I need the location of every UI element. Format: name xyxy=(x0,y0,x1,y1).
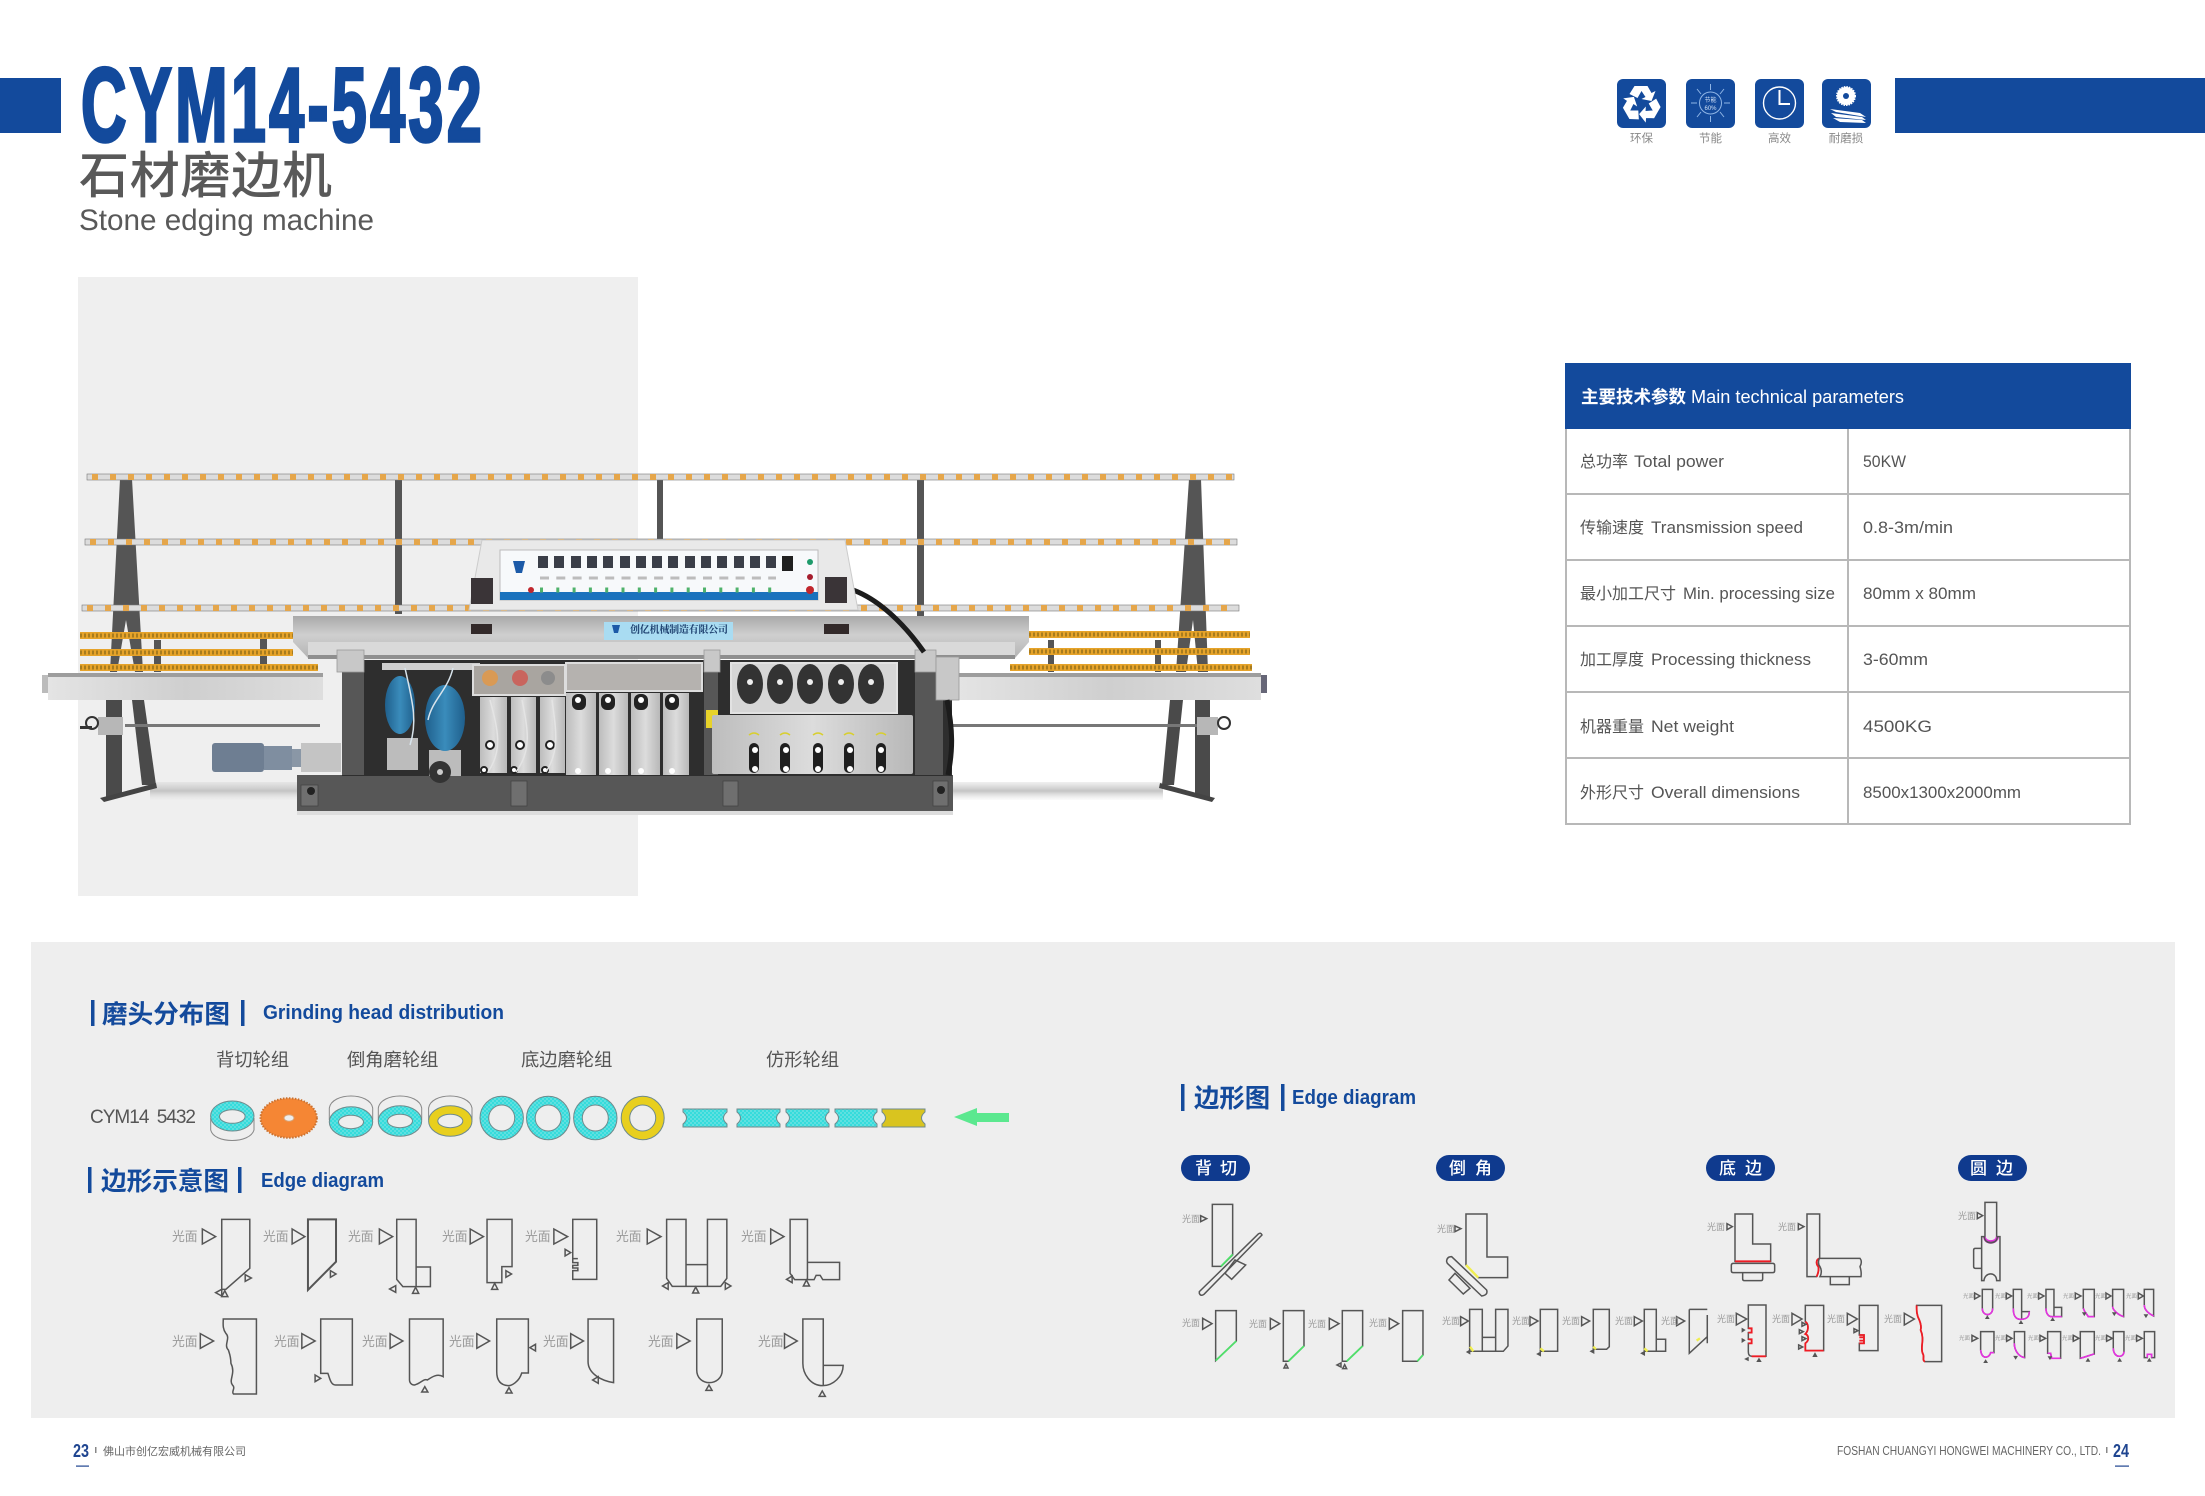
row: total power: 50KW xyxy=(1863,452,1906,471)
table header xyxy=(1565,363,2131,429)
polished-face labels: 光面 xyxy=(1959,1334,1971,1342)
polished-face labels: 光面 xyxy=(1958,1209,1976,1222)
category pill: chamfer: 倒 xyxy=(1449,1154,1466,1179)
polished-face labels: 光面 xyxy=(1963,1292,1975,1300)
polished-face labels: 光面 xyxy=(1442,1314,1460,1327)
row: min processing size: 最小加工尺寸 xyxy=(1580,580,1676,604)
polished-face labels xyxy=(172,1226,784,1350)
polished-face labels: 光面 xyxy=(263,1226,289,1245)
polished-face labels: 光面 xyxy=(543,1331,569,1350)
polished-face labels: 光面 xyxy=(2095,1334,2106,1342)
icon: wear resistant: 耐磨损 xyxy=(1829,130,1864,146)
table grid xyxy=(1566,429,2130,824)
photo backdrop panel xyxy=(78,277,638,896)
polished-face labels: 光面 xyxy=(741,1226,767,1245)
outlines xyxy=(1199,1204,1707,1369)
polished-face labels: 光面 xyxy=(2063,1292,2074,1300)
heading: grinding head distribution: 磨头分布图 xyxy=(102,994,230,1031)
feed gear motor xyxy=(212,743,341,772)
row: net weight: 4500KG xyxy=(1863,717,1932,736)
header accent bar left xyxy=(0,78,61,133)
beam nameplate xyxy=(604,621,733,640)
row: total power: Total power xyxy=(1634,452,1724,471)
polished-face labels: 光面 xyxy=(449,1331,475,1350)
category pill: round edge xyxy=(1958,1154,2027,1181)
polished-face labels: 光面 xyxy=(1707,1220,1725,1233)
footer left xyxy=(73,1441,246,1467)
chamfer wheels xyxy=(329,1096,472,1137)
polished-face labels: 光面 xyxy=(525,1226,551,1245)
edge profile schematic rows xyxy=(172,1219,843,1396)
polished-face labels: 光面 xyxy=(274,1331,300,1350)
footer right xyxy=(1837,1441,2129,1467)
polished-face labels: 光面 xyxy=(172,1226,198,1245)
outlines xyxy=(1727,1202,2155,1363)
footer left: 佛山市创亿宏威机械有限公司 xyxy=(103,1443,246,1459)
footer right: 24 xyxy=(2113,1441,2129,1461)
machine body dark frame xyxy=(342,660,952,776)
row: total power: 总功率 xyxy=(1580,448,1628,472)
icon: energy saving xyxy=(1686,79,1735,146)
polished-face labels: 光面 xyxy=(1182,1316,1200,1329)
polished-face labels: 光面 xyxy=(2126,1292,2138,1300)
polished-face labels: 光面 xyxy=(2027,1292,2039,1300)
row: transmission speed: Transmission speed xyxy=(1651,518,1803,537)
black cables xyxy=(853,590,952,775)
spec table xyxy=(1565,363,2131,824)
category pill: round edge: 圆 xyxy=(1970,1154,1987,1179)
control box xyxy=(469,540,858,610)
grinding head group labels: 仿形轮组 xyxy=(766,1046,839,1072)
icon: energy saving: 60% xyxy=(1704,106,1717,112)
row: net weight xyxy=(1580,713,1932,737)
header accent bar right xyxy=(1895,78,2205,133)
category pill: back cut: 背 xyxy=(1195,1154,1212,1179)
polished-face labels: 光面 xyxy=(1661,1314,1679,1327)
category pill: chamfer xyxy=(1436,1154,1505,1181)
polished-face labels: 光面 xyxy=(1249,1317,1267,1330)
polished-face labels: 光面 xyxy=(1437,1222,1455,1235)
gearboxes xyxy=(337,650,959,700)
heading: grinding head distribution xyxy=(91,994,504,1031)
polished-face labels: 光面 xyxy=(2095,1292,2106,1300)
profile wheels xyxy=(683,1109,925,1127)
polished-face labels: 光面 xyxy=(1884,1312,1902,1325)
subtitle chinese: 石材磨边机 xyxy=(79,136,332,208)
category pill: chamfer: 角 xyxy=(1475,1154,1492,1179)
subtitle english: Stone edging machine xyxy=(79,204,374,237)
polished-face labels: 光面 xyxy=(172,1331,198,1350)
polished-face labels: 光面 xyxy=(1827,1312,1845,1325)
category pill: bottom edge: 边 xyxy=(1745,1154,1762,1179)
category pill: round edge: 边 xyxy=(1996,1154,2013,1179)
category pill: bottom edge: 底 xyxy=(1719,1154,1736,1179)
polished-face labels: 光面 xyxy=(2125,1334,2136,1342)
icon: wear resistant xyxy=(1822,79,1871,146)
title: model number: CYM14-5432 xyxy=(81,48,482,164)
polished-face labels: 光面 xyxy=(648,1331,674,1350)
control panel displays xyxy=(538,556,793,571)
polished-face labels: 光面 xyxy=(758,1331,784,1350)
profile wheels housing xyxy=(731,663,897,713)
profile plate with slots xyxy=(712,715,913,774)
category pill: bottom edge xyxy=(1706,1154,1775,1181)
polished-face labels: 光面 xyxy=(348,1226,374,1245)
model label: CYM14 5432 xyxy=(90,1107,196,1128)
category pill: back cut xyxy=(1181,1154,1250,1181)
glass rack uprights xyxy=(110,474,1208,672)
row: processing thickness: 3-60mm xyxy=(1863,650,1928,669)
polished-face labels: 光面 xyxy=(1995,1292,2007,1300)
legs and lead screws xyxy=(80,700,1230,802)
edge diagrams: back cut and chamfer xyxy=(1182,1204,1707,1369)
side tables xyxy=(42,673,1267,700)
heading: grinding head distribution: Grinding head distribution xyxy=(263,1002,504,1024)
heading: edge diagram left: 边形示意图 xyxy=(101,1161,229,1198)
row: processing thickness xyxy=(1580,646,1928,670)
row: net weight: Net weight xyxy=(1651,717,1734,736)
polished-face labels: 光面 xyxy=(442,1226,468,1245)
table header: 主要技术参数 xyxy=(1581,384,1686,409)
heading: edge diagram right xyxy=(1181,1079,1416,1115)
polished-face labels xyxy=(1707,1209,2138,1342)
machine illustration xyxy=(42,474,1267,815)
row: transmission speed xyxy=(1580,514,1953,538)
edge diagrams: bottom edge and round edge xyxy=(1707,1202,2155,1363)
row: min processing size: 80mm x 80mm xyxy=(1863,584,1976,603)
row: total power xyxy=(1580,448,1906,472)
polished-face labels: 光面 xyxy=(1369,1316,1387,1329)
icon: feed direction arrow xyxy=(954,1108,1009,1126)
icon: energy saving: 节能 xyxy=(1699,130,1722,146)
icon: recycling: 环保 xyxy=(1630,130,1653,146)
glass rack rails xyxy=(82,474,1239,611)
footer left: 23 xyxy=(73,1441,89,1461)
polished-face labels: 光面 xyxy=(1717,1312,1735,1325)
polished-face labels: 光面 xyxy=(1778,1220,1796,1233)
row: overall dimensions: 外形尺寸 xyxy=(1580,779,1644,803)
polished-face labels: 光面 xyxy=(2062,1334,2074,1342)
back-cut wheels xyxy=(211,1098,317,1140)
base frame xyxy=(297,775,953,811)
icon: clock xyxy=(1755,79,1804,146)
icon: clock: 高效 xyxy=(1768,130,1791,146)
row: net weight: 机器重量 xyxy=(1580,713,1644,737)
category pill: back cut: 切 xyxy=(1220,1154,1237,1179)
polished-face labels: 光面 xyxy=(1772,1312,1790,1325)
icon: recycling xyxy=(1617,79,1666,146)
polished-face labels: 光面 xyxy=(1512,1314,1530,1327)
row: overall dimensions: 8500x1300x2000mm xyxy=(1863,783,2021,802)
top beam xyxy=(293,616,1029,659)
polished-face labels: 光面 xyxy=(1308,1317,1326,1330)
heading: edge diagram left xyxy=(88,1161,384,1198)
polished-face labels: 光面 xyxy=(362,1331,388,1350)
polished-face labels: 光面 xyxy=(1615,1314,1633,1327)
row: overall dimensions: Overall dimensions xyxy=(1651,783,1800,802)
edge profile outlines xyxy=(200,1219,843,1396)
spindle motors xyxy=(385,668,465,783)
polished-face labels: 光面 xyxy=(1562,1314,1580,1327)
floor shadow xyxy=(150,782,1163,815)
bottom edge wheels xyxy=(480,1096,664,1140)
grinding head group labels: 倒角磨轮组 xyxy=(347,1046,438,1072)
row: transmission speed: 传输速度 xyxy=(1580,514,1644,538)
row: processing thickness: Processing thickness xyxy=(1651,650,1811,669)
heading: edge diagram right: Edge diagram xyxy=(1292,1087,1416,1109)
back-cut plates and chamfer group xyxy=(473,665,565,773)
grinding wheel distribution chart xyxy=(211,1096,1009,1140)
bottom grey panel xyxy=(31,942,2175,1418)
table header: Main technical parameters xyxy=(1691,387,1904,407)
polished-face labels xyxy=(1182,1212,1679,1330)
heading: edge diagram right: 边形图 xyxy=(1194,1079,1270,1115)
grinding head group labels: 背切轮组 xyxy=(216,1046,289,1072)
footer right: FOSHAN CHUANGYI HONGWEI MACHINERY CO., LTD. xyxy=(1837,1443,2101,1458)
row: transmission speed: 0.8-3m/min xyxy=(1863,518,1953,537)
icon: energy saving: 节能 xyxy=(1704,95,1717,104)
row: overall dimensions xyxy=(1580,779,2021,803)
row: min processing size xyxy=(1580,580,1976,604)
polished-face labels: 光面 xyxy=(1995,1334,2007,1342)
row: processing thickness: 加工厚度 xyxy=(1580,646,1644,670)
grinding head group labels: 底边磨轮组 xyxy=(521,1046,612,1072)
grinding head group labels xyxy=(216,1046,839,1072)
polished-face labels: 光面 xyxy=(1182,1212,1200,1225)
polished-face labels: 光面 xyxy=(616,1226,642,1245)
feature icons row xyxy=(1617,79,1871,146)
row: min processing size: Min. processing size xyxy=(1683,584,1835,603)
polished-face labels: 光面 xyxy=(2028,1334,2040,1342)
heading: edge diagram left: Edge diagram xyxy=(261,1170,384,1192)
beam nameplate: 创亿机械制造有限公司 xyxy=(630,621,728,636)
orange conveyor bars xyxy=(80,631,1252,671)
bottom edge plates xyxy=(566,663,702,775)
